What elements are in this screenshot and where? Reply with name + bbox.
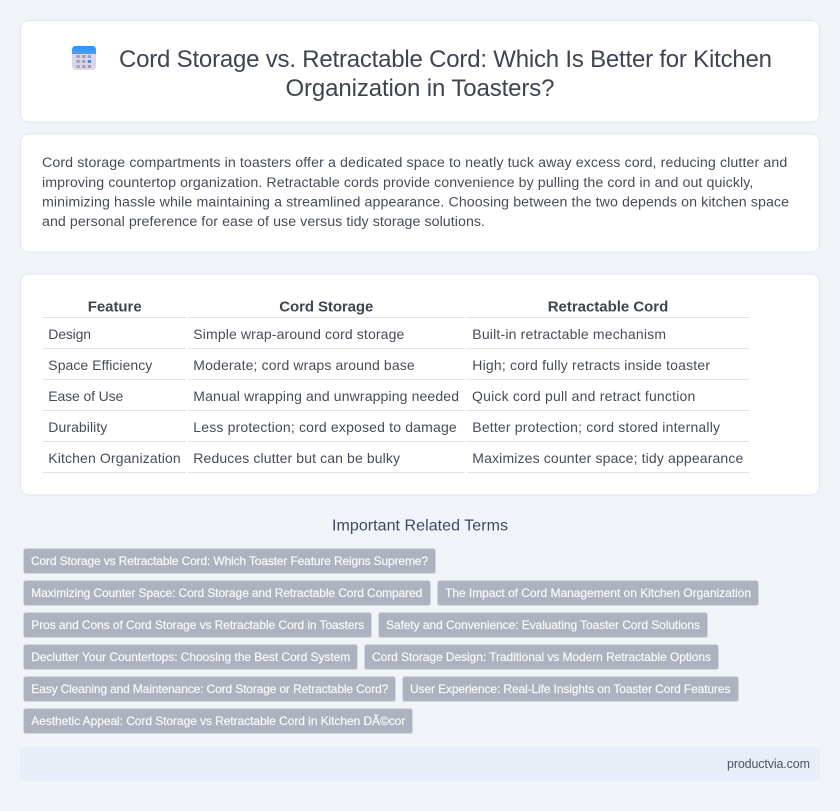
title [119, 46, 772, 102]
row: design: Design [48, 326, 91, 342]
tag [24, 548, 436, 574]
tag [378, 612, 708, 638]
title: Cord Storage vs. Retractable Cord: Which Is Better for Kitchen [119, 46, 772, 73]
tag [24, 644, 358, 670]
tag [402, 676, 738, 702]
title: Organization in Toasters? [286, 75, 554, 102]
tag [24, 708, 412, 734]
panel: introduction [20, 134, 820, 252]
panel: header [20, 20, 820, 122]
row: ease of use: Manual wrapping and unwrapping needed [193, 388, 459, 404]
intro text block: Cord storage compartments in toasters offer a dedicated space to neatly tuck away excess cord, reducing clutter and [42, 155, 787, 171]
intro text block: minimizing hassle while maintaining a streamlined appearance. Choosing between the two depends on kitchen space [42, 194, 789, 210]
row: durability: Less protection; cord exposed to damage [193, 419, 457, 435]
tag: Cord Storage Design: Traditional vs Modern Retractable Options [372, 650, 711, 664]
row: design [48, 326, 666, 342]
tag [438, 580, 758, 606]
tag [24, 612, 372, 638]
tag: Safety and Convenience: Evaluating Toaster Cord Solutions [386, 618, 700, 632]
intro text block: and personal preference for ease of use versus tidy storage solutions. [42, 214, 485, 230]
row: space efficiency: High; cord fully retracts inside toaster [472, 357, 710, 373]
footer [20, 747, 820, 781]
row: durability: Better protection; cord stored internally [472, 419, 720, 435]
tag: Aesthetic Appeal: Cord Storage vs Retractable Cord in Kitchen DÃ©cor [31, 714, 405, 728]
tag: Pros and Cons of Cord Storage vs Retractable Cord in Toasters [31, 618, 364, 632]
tag [364, 644, 718, 670]
row: design: Simple wrap-around cord storage [193, 326, 405, 342]
table header row: Retractable Cord [548, 298, 668, 316]
tag: The Impact of Cord Management on Kitchen Organization [445, 586, 751, 600]
row: space efficiency [48, 357, 710, 373]
row: kitchen organization: Reduces clutter but can be bulky [193, 450, 400, 466]
row: space efficiency: Moderate; cord wraps around base [193, 357, 415, 373]
row: kitchen organization [48, 450, 744, 466]
table header row [88, 298, 668, 316]
table header row: Cord Storage [279, 298, 373, 316]
footer: productvia.com [727, 757, 810, 771]
row: durability [48, 419, 720, 435]
tag: Declutter Your Countertops: Choosing the Best Cord System [31, 650, 350, 664]
tag [24, 580, 430, 606]
tag: User Experience: Real-Life Insights on Toaster Cord Features [410, 682, 730, 696]
intro text block [42, 155, 789, 230]
tag: Maximizing Counter Space: Cord Storage and Retractable Cord Compared [31, 586, 422, 600]
row: space efficiency: Space Efficiency [48, 357, 152, 373]
table header row: Feature [88, 298, 142, 316]
row: durability: Durability [48, 419, 107, 435]
tag: Cord Storage vs Retractable Cord: Which Toaster Feature Reigns Supreme? [31, 554, 428, 568]
heading: important related terms: Important Related Terms [332, 518, 508, 534]
row: ease of use [48, 388, 695, 404]
tag: Easy Cleaning and Maintenance: Cord Storage or Retractable Cord? [31, 682, 389, 696]
panel: comparison table [20, 274, 820, 495]
row: kitchen organization: Maximizes counter space; tidy appearance [472, 450, 744, 466]
intro text block: improving countertop organization. Retractable cords provide convenience by pulling the cord in and out quickly, [42, 175, 753, 191]
row: kitchen organization: Kitchen Organization [48, 450, 181, 466]
row: ease of use: Ease of Use [48, 388, 124, 404]
tag [24, 676, 396, 702]
icon: calendar [72, 46, 96, 70]
tag group: related terms [24, 548, 758, 734]
row: ease of use: Quick cord pull and retract function [472, 388, 695, 404]
row: design: Built-in retractable mechanism [472, 326, 666, 342]
